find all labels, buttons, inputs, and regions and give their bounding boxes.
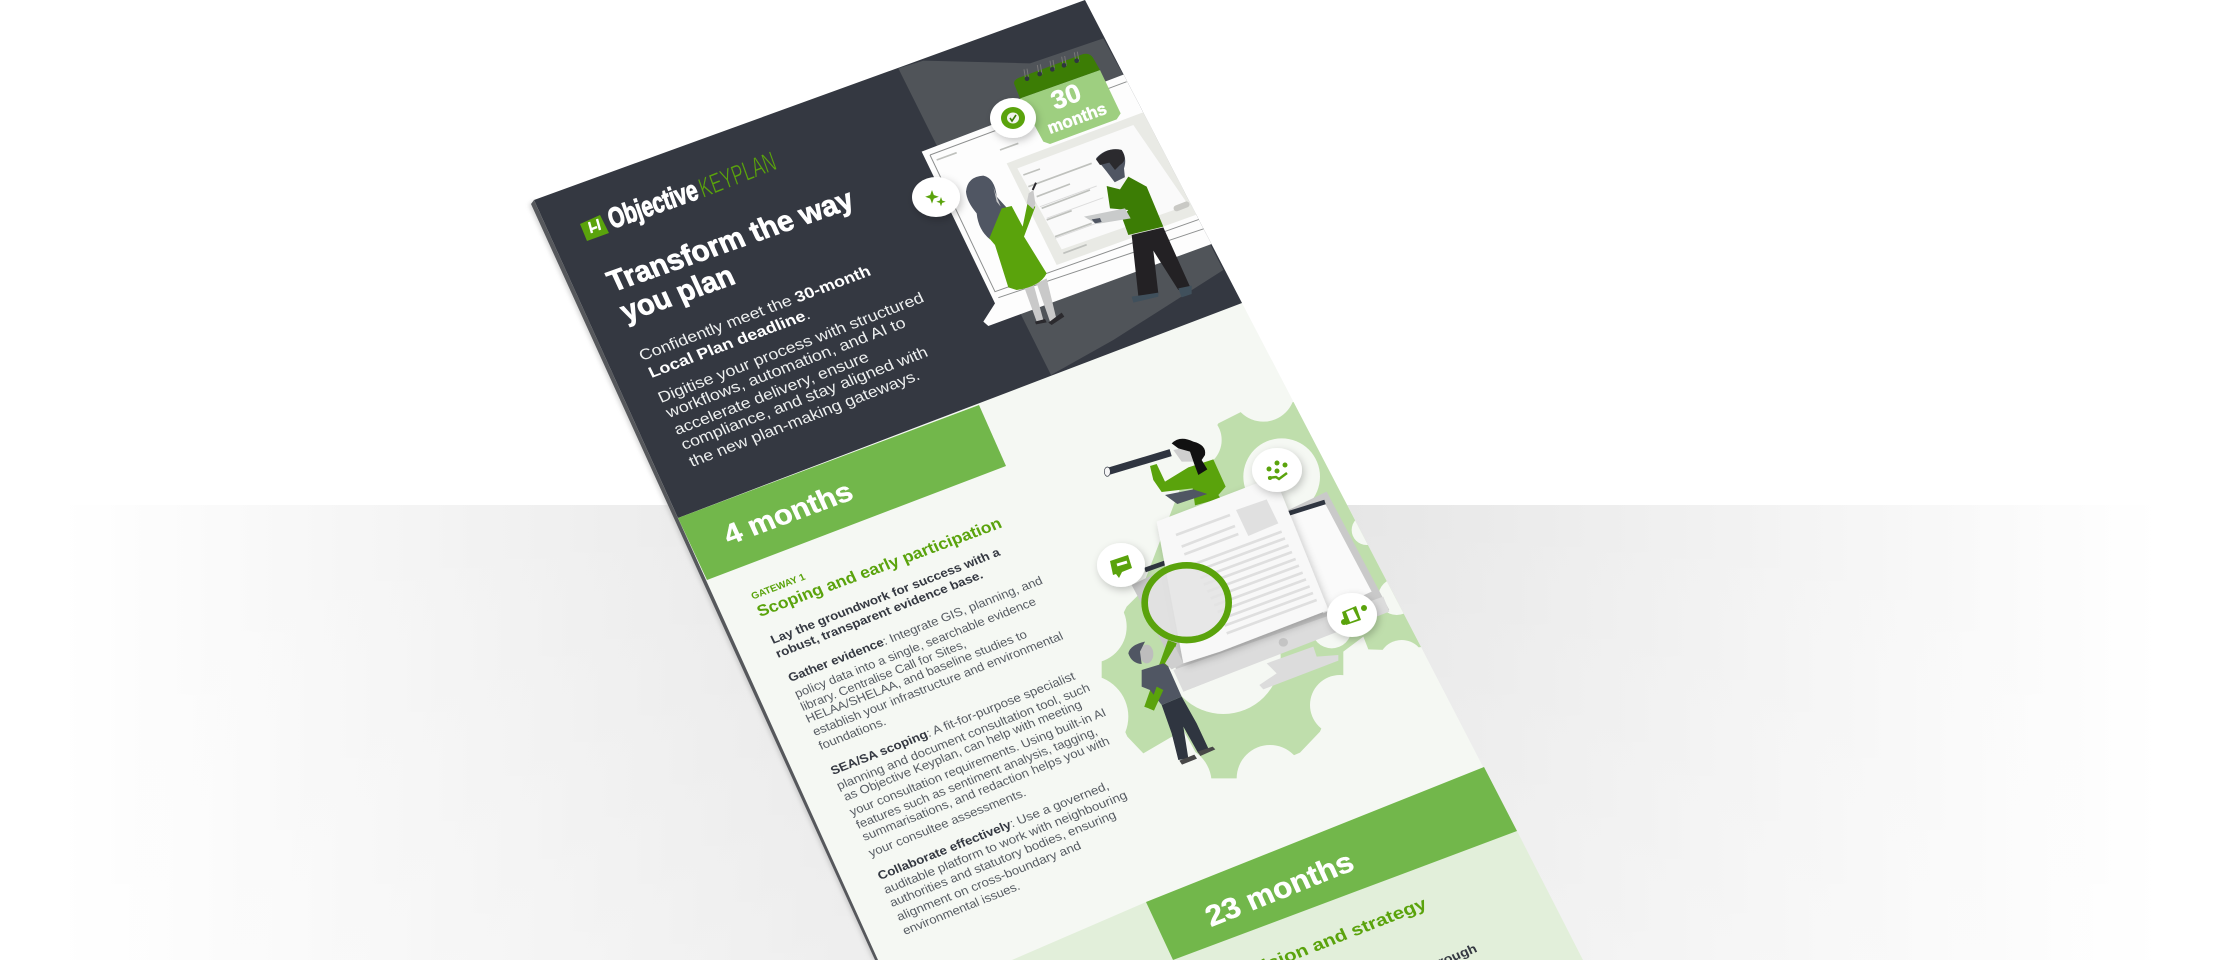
paragraph: SEA/SA scoping: features such as sentiment analysis, tagging, (853, 724, 1100, 832)
logo: Objective Keyplan: Objective (604, 175, 702, 236)
text block: intro: workflows, automation, and AI to (662, 314, 909, 422)
band: 4 months: 4 months (719, 476, 858, 551)
text block: intro: the new plan-making gateways. (686, 367, 923, 470)
band: 23 months (1146, 767, 1517, 960)
paragraph: SEA/SA scoping: your consultation requirements. Using built-in AI (847, 705, 1108, 819)
calendar label: 30 months (1045, 79, 1109, 138)
band: 4 months (678, 405, 1006, 580)
laptop (922, 73, 1213, 326)
monitor (1132, 492, 1389, 692)
logo: Objective Keyplan (580, 145, 780, 241)
magnifying glass (1145, 565, 1229, 708)
icon: comment badge (1097, 543, 1145, 587)
text block: intro: Digitise your process with structured (655, 289, 927, 406)
paragraph: collaborate effectively (875, 778, 1129, 938)
icon: phone badge (1327, 593, 1377, 637)
man (1084, 149, 1192, 303)
paragraph: SEA/SA scoping: planning and document consultation tool, such (834, 680, 1092, 793)
background: grey floor (0, 505, 2220, 960)
panel: dark header (534, 0, 1242, 518)
man with magnifier (1128, 642, 1215, 765)
text block: intro: accelerate delivery, ensure (671, 349, 872, 438)
gateway heading: Scoping and early participation (754, 514, 1005, 620)
page edge shadow (529, 200, 882, 960)
text block: gateway 2 (1247, 894, 1479, 960)
paragraph: SEA/SA scoping: SEA/SA scoping: A fit-for-purpose specialist (828, 669, 1078, 778)
icon: sparkle badge (912, 177, 960, 217)
calendar label: 30 months: 30 (1047, 79, 1085, 116)
paragraph: gather evidence: policy data into a single, searchable evidence (792, 594, 1038, 701)
gear illustration (1102, 402, 1421, 778)
panel: lower section (1012, 831, 1583, 960)
paragraph: gather evidence: Gather evidence: Integrate GIS, planning, and (786, 573, 1045, 685)
text block: intro: compliance, and stay aligned with (678, 344, 931, 453)
paragraph: SEA/SA scoping (828, 669, 1112, 860)
woman (966, 176, 1064, 325)
paragraph: collaborate effectively: alignment on cross-boundary and (894, 838, 1083, 924)
text block: intro: Local Plan deadline. (646, 306, 813, 381)
text block: gateway 1 (750, 514, 1129, 938)
document (1157, 483, 1328, 663)
panel: infographic page (534, 0, 1583, 960)
gateway lead: Lay the groundwork for success with a (768, 545, 1003, 647)
light beam (898, 38, 1223, 375)
calendar (1014, 52, 1121, 144)
gear (1102, 402, 1421, 778)
paragraph: SEA/SA scoping: your consultee assessments. (866, 785, 1028, 860)
gateway label: GATEWAY 1 (750, 572, 808, 602)
paragraph: gather evidence: establish your infrastructure and environmental (810, 629, 1065, 739)
hero illustration (898, 38, 1223, 375)
paragraph: collaborate effectively: auditable platform to work with neighbouring (881, 788, 1129, 897)
paragraph: gather evidence: library. Centralise Call for Sites, (798, 637, 968, 714)
icon: check badge (990, 98, 1036, 138)
band: 23 months: 23 months (1201, 846, 1359, 933)
paragraph: collaborate effectively: authorities and statutory bodies, ensuring (887, 807, 1118, 910)
paragraph: gather evidence: HELAA/SHELAA, and baseline studies to (803, 627, 1029, 726)
woman with telescope (1104, 439, 1226, 505)
paragraph: SEA/SA scoping: as Objective Keyplan, can help with meeting (841, 697, 1084, 804)
text block: intro: Confidently meet the 30-month (636, 263, 874, 364)
gateway lead: robust, transparent evidence base. (773, 567, 985, 661)
paragraph: collaborate effectively: environmental issues. (900, 879, 1022, 938)
paragraph: gather evidence: foundations. (816, 714, 888, 753)
paragraph: collaborate effectively: Collaborate effectively: Use a governed, (875, 778, 1111, 883)
calendar label: 30 months: months (1045, 99, 1109, 138)
icon: people badge (1252, 448, 1302, 492)
logo: Objective Keyplan: KEYPLAN (695, 145, 780, 204)
text block: intro (636, 263, 931, 470)
title: Transform the way (602, 184, 860, 298)
paragraph: gather evidence (786, 573, 1065, 753)
paragraph: SEA/SA scoping: summarisations, and redaction helps you with (860, 734, 1112, 844)
title: you plan (615, 260, 740, 328)
